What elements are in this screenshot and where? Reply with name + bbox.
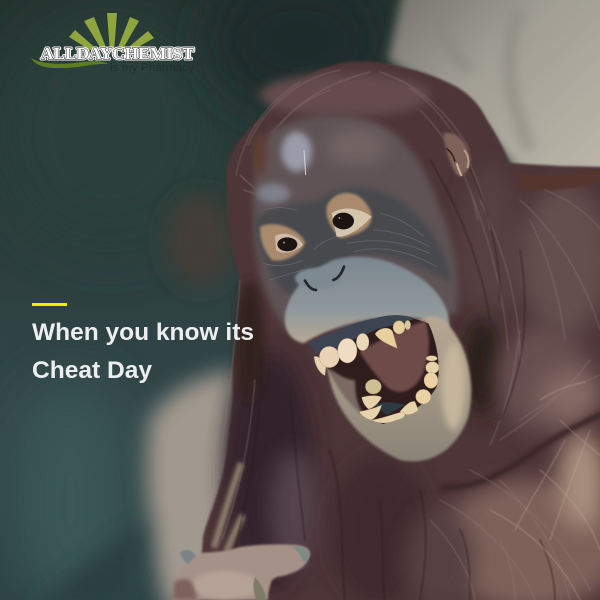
logo sun rays bbox=[69, 13, 154, 55]
tongue bbox=[359, 321, 429, 392]
logo tagline: is my Pharmacy bbox=[110, 62, 195, 74]
reddish forehead side bbox=[253, 133, 267, 177]
ear bbox=[443, 133, 470, 176]
headline: Cheat Day bbox=[32, 357, 153, 384]
headline bbox=[32, 319, 254, 384]
upper teeth bbox=[314, 320, 411, 376]
face skin bbox=[253, 116, 458, 330]
hair shading bbox=[214, 73, 600, 600]
logo wordmark: ALLDAYCHEMIST bbox=[41, 44, 195, 63]
headline: When you know its bbox=[32, 319, 254, 346]
logo swoosh bbox=[31, 58, 108, 68]
eye: left bbox=[260, 224, 305, 261]
hair and body silhouette bbox=[198, 61, 600, 600]
upper gum bbox=[308, 315, 415, 353]
orangutan bbox=[173, 61, 600, 600]
logo bbox=[31, 13, 195, 74]
muzzle upper lip bbox=[285, 257, 449, 343]
logo wordmark: ALLDAYCHEMIST bbox=[41, 44, 195, 63]
dark mask around eyes bbox=[255, 187, 452, 297]
eye: right bbox=[326, 193, 372, 238]
mouth interior bbox=[327, 317, 439, 424]
forehead highlight bbox=[257, 128, 387, 203]
lower gum bbox=[375, 402, 405, 415]
wrinkle lines bbox=[263, 207, 437, 280]
hair strands bbox=[212, 70, 600, 600]
nose bbox=[295, 267, 344, 290]
face, drawn in a 3x local coordinate space bbox=[253, 116, 471, 461]
inner lower lip wall bbox=[327, 367, 367, 418]
lower lip bbox=[327, 317, 471, 461]
hand bbox=[173, 544, 310, 600]
accent bar bbox=[32, 303, 67, 306]
lower teeth bbox=[359, 356, 439, 423]
